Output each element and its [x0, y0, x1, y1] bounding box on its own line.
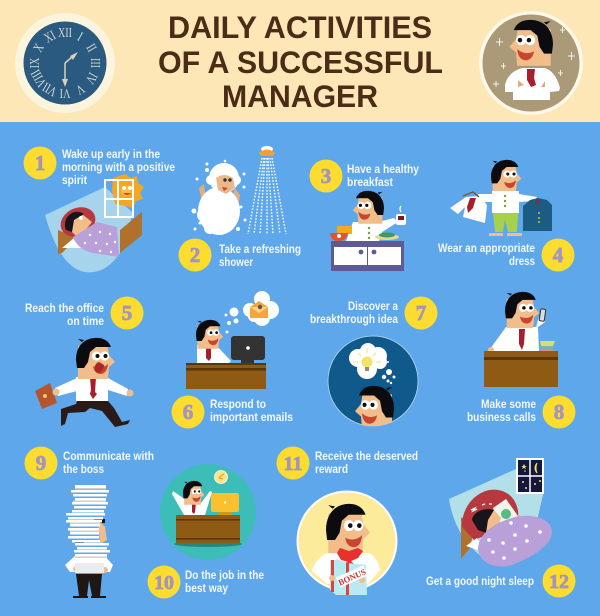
text: step 8: Make some	[481, 399, 536, 411]
illustration: choosing clothes	[450, 160, 552, 236]
step 11: reward	[276, 446, 418, 595]
text: step 6: important emails	[210, 412, 293, 424]
text: step 9: Communicate with	[63, 451, 154, 463]
number badge 1: 1	[35, 151, 45, 175]
title: OF A SUCCESSFUL	[158, 44, 443, 80]
icon: wall clock: II	[83, 41, 100, 55]
icon: wall clock: X	[30, 40, 47, 55]
title: MANAGER	[222, 78, 378, 114]
text: step 11	[315, 451, 418, 476]
text: step 3: Have a healthy	[347, 164, 420, 176]
illustration: sleeping in bed at night	[449, 459, 552, 566]
step 3: breakfast	[310, 160, 420, 271]
text: step 5	[25, 303, 104, 328]
icon: wall clock: I	[75, 29, 86, 44]
number badge 2: 2	[190, 243, 200, 267]
text: step 2	[219, 244, 301, 269]
number badge 11: 11	[284, 453, 302, 475]
icon: wall clock: XII	[58, 24, 72, 40]
number badge 6: 6	[183, 400, 193, 424]
text: step 6	[210, 399, 293, 424]
icon: manager portrait	[479, 11, 583, 115]
icon: wall clock: VII	[40, 79, 60, 100]
text: step 2: shower	[219, 257, 253, 269]
text: step 2: Take a refreshing	[219, 244, 301, 256]
icon: wall clock: XI	[41, 27, 58, 46]
text: step 7	[310, 301, 399, 326]
text: step 10: Do the job in the	[185, 570, 264, 582]
number badge 11	[276, 446, 310, 480]
icon: wall clock: V	[73, 81, 87, 98]
illustration: foam and shower	[192, 146, 286, 235]
text: step 7: breakthrough idea	[310, 314, 399, 326]
illustration: hidden behind stack of paper	[65, 485, 113, 598]
step 9: boss	[24, 446, 154, 598]
icon: wall clock: VI	[60, 86, 70, 102]
text: step 1	[62, 149, 175, 187]
illustration: breakfast at counter	[330, 191, 406, 271]
number badge 9: 9	[36, 451, 46, 475]
illustration: on the phone at desk	[484, 292, 558, 387]
text: step 3	[347, 164, 420, 189]
text: step 10: best way	[185, 583, 229, 595]
step 4: dress	[438, 160, 574, 272]
text: step 1: Wake up early in the	[62, 149, 160, 161]
number badge 12	[542, 564, 576, 598]
text: step 8: business calls	[467, 412, 536, 424]
text: step 10	[185, 570, 264, 595]
text: step 7: Discover a	[348, 301, 399, 313]
text: step 8	[467, 399, 536, 424]
number badge 8: 8	[554, 400, 564, 424]
step 5: office	[25, 296, 144, 427]
illustration: at desk with computer and thought bubble	[186, 291, 279, 389]
illustration: bonus gift: BONUS	[337, 566, 368, 588]
illustration: running manager	[35, 338, 134, 427]
illustration: bonus gift	[298, 492, 396, 595]
number badge 9	[24, 446, 58, 480]
illustration: lightbulb idea	[328, 336, 418, 429]
illustration: cheering at desk	[160, 464, 256, 560]
number badge 12: 12	[549, 571, 569, 593]
number badge 10: 10	[154, 572, 174, 594]
step 8: calls	[467, 292, 576, 428]
text: step 11: reward	[315, 464, 348, 476]
number badge 4: 4	[553, 243, 564, 267]
text: step 9: the boss	[63, 464, 104, 476]
step 6: emails	[172, 291, 293, 428]
icon: wall clock: III	[88, 58, 104, 68]
number badge 3: 3	[321, 164, 331, 188]
text: step 9	[63, 451, 154, 476]
icon: wall clock: IX	[26, 58, 42, 68]
number badge 7: 7	[416, 301, 426, 325]
text: step 11: Receive the deserved	[315, 451, 418, 463]
text: step 5: on time	[67, 316, 104, 328]
text: step 1: spirit	[62, 175, 87, 187]
title: DAILY ACTIVITIES	[168, 9, 432, 45]
text: step 3: breakfast	[347, 177, 393, 189]
step 7: idea	[310, 296, 438, 429]
text: step 4: dress	[509, 256, 535, 268]
illustration: waking in bed with sun at window	[45, 174, 144, 272]
text: step 12: Get a good night sleep	[426, 576, 534, 588]
text: step 5: Reach the office	[25, 303, 104, 315]
text: step 4: Wear an appropriate	[438, 243, 535, 255]
step 12: sleep	[426, 459, 576, 598]
text: step 1: morning with a positive	[62, 162, 175, 174]
title	[158, 9, 443, 114]
icon: wall clock: VIII	[27, 67, 50, 90]
text: step 6: Respond to	[210, 399, 266, 411]
number badge 5: 5	[122, 301, 132, 325]
icon: wall clock: IV	[82, 70, 101, 87]
header band	[0, 0, 600, 122]
text: step 4	[438, 243, 535, 268]
step 10: the job	[148, 464, 264, 598]
step 2: shower	[178, 146, 301, 272]
number badge 1	[24, 146, 56, 180]
step 1: wake up	[24, 146, 175, 272]
icon: wall clock	[15, 13, 115, 113]
